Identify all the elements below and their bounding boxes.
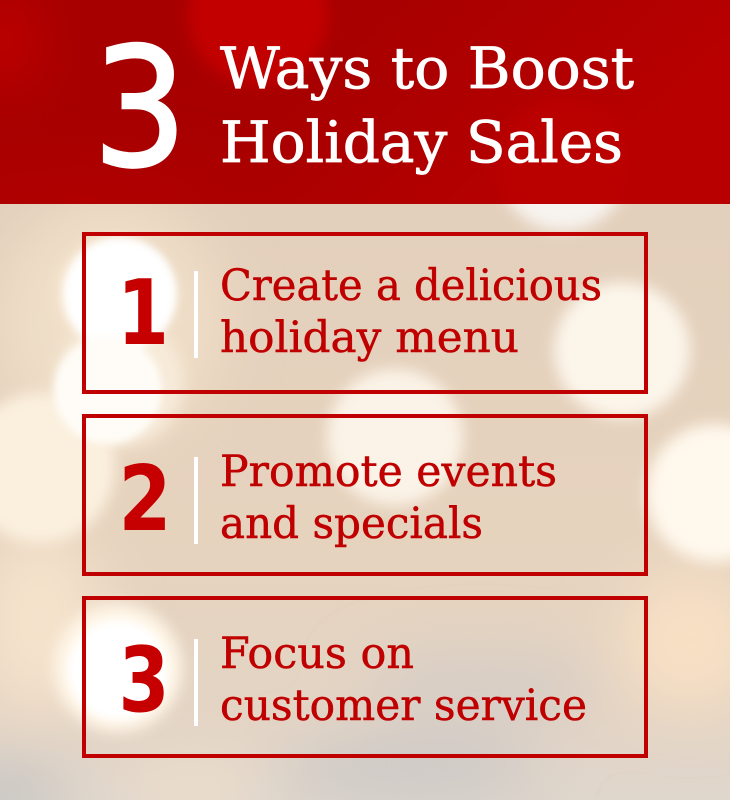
panel: step 3 bbox=[84, 598, 646, 756]
step 3 text bbox=[220, 629, 587, 731]
title bbox=[93, 13, 634, 204]
title line 2: Holiday Sales bbox=[220, 110, 623, 176]
step 2 text: and specials bbox=[220, 499, 483, 549]
step 1 text: holiday menu bbox=[220, 313, 519, 363]
step 3 text: Focus on bbox=[220, 629, 414, 679]
number 1: 1 bbox=[117, 261, 169, 366]
number 2: 2 bbox=[118, 447, 172, 552]
number 3: 3 bbox=[118, 628, 170, 733]
step 3 text: customer service bbox=[220, 681, 587, 731]
step 2 text: Promote events bbox=[220, 447, 557, 497]
title line 1: Ways to Boost bbox=[220, 36, 634, 102]
step 1 text: Create a delicious bbox=[220, 261, 602, 311]
step 1 text bbox=[220, 261, 602, 363]
panel: step 2 bbox=[84, 416, 646, 574]
step 2 text bbox=[220, 447, 557, 549]
big numeral 3: 3 bbox=[93, 13, 187, 204]
header band bbox=[0, 0, 730, 204]
panel: step 1 bbox=[84, 234, 646, 392]
